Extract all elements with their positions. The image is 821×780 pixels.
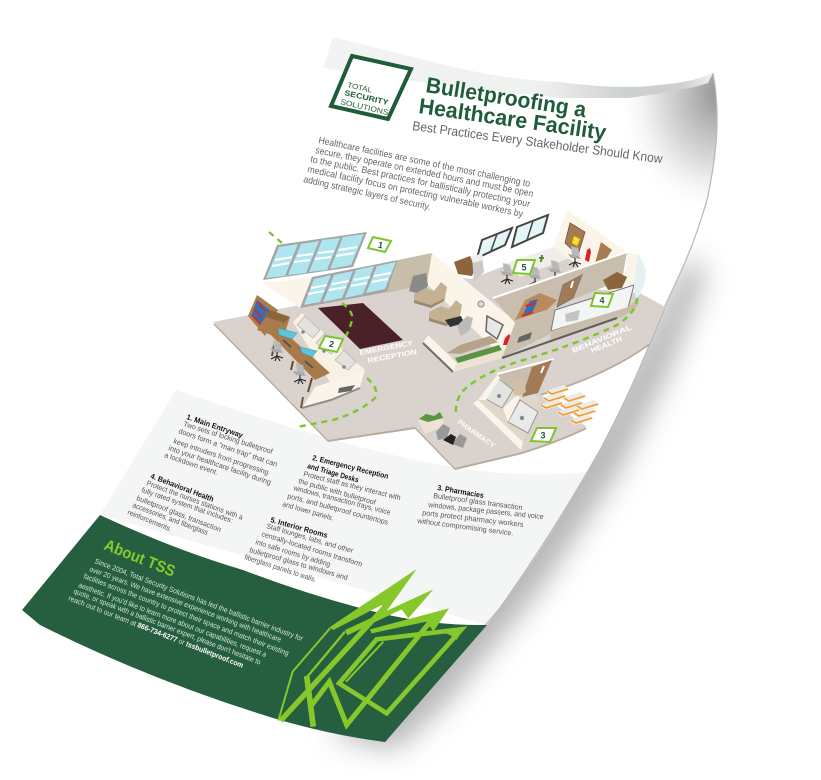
office chairs xyxy=(270,340,306,384)
cabinet xyxy=(603,272,627,290)
logo: SOLUTIONS xyxy=(340,97,389,117)
about text: aesthetic. If you'd like to learn more about our capabilities, request a xyxy=(77,580,269,659)
right edge of the sheet xyxy=(385,73,717,742)
wall clock xyxy=(478,301,484,307)
floor labels: EMERGENCY xyxy=(359,340,414,357)
title: Bulletproofing a xyxy=(424,72,589,122)
badge 1 xyxy=(368,237,391,252)
wall sign xyxy=(517,332,532,343)
floor labels: RECEPTION xyxy=(367,349,418,365)
booth glass panels xyxy=(486,378,538,433)
filing cabinet xyxy=(257,310,290,339)
text block: pharmacies: Bulletproof glass transaction xyxy=(433,491,523,512)
text block: main entryway: Two sets of locking bulletproof xyxy=(182,419,275,456)
text block: pharmacies xyxy=(416,483,544,538)
extinguisher xyxy=(585,248,591,262)
text block: main entryway: 1. Main Entryway xyxy=(185,412,245,440)
text block: main entryway: doors form a “man trap” that can xyxy=(177,426,279,469)
intro paragraph: to the public. Best practices for ballistically protecting your xyxy=(309,154,531,210)
base stripe xyxy=(502,318,617,358)
curl shading xyxy=(638,73,716,191)
lounge chairs xyxy=(414,282,462,326)
intro paragraph: secure, they operate on extended hours and must be open xyxy=(314,145,534,200)
entry windows back row xyxy=(263,232,367,280)
glass corner xyxy=(634,255,646,300)
badge 5 xyxy=(513,260,535,274)
booth cream walls xyxy=(473,375,523,450)
plant xyxy=(539,255,544,262)
text block: interior rooms: 5. Interior Rooms xyxy=(269,515,329,540)
paper sheet xyxy=(100,37,718,742)
badge 1: 1 xyxy=(377,240,384,250)
panel: about TSS xyxy=(22,515,487,742)
room floor xyxy=(468,247,582,298)
text block: behavioral health: 4. Behavioral Health xyxy=(149,471,215,504)
logo: SECURITY xyxy=(344,88,389,107)
subtitle: Best Practices Every Stakeholder Should Know xyxy=(412,118,664,166)
floor xyxy=(213,275,665,470)
badge 2 xyxy=(319,336,343,352)
door xyxy=(557,275,582,307)
pharmacy waiting chairs and planter xyxy=(418,412,467,448)
curved lower wall xyxy=(550,290,640,340)
about text: reach out to our team at 866-734-6277 or tssbulletproof.com xyxy=(67,593,245,670)
badge 5: 5 xyxy=(521,262,527,272)
text block: behavioral health: accessories, and fiberglass xyxy=(131,500,210,537)
text block: behavioral health xyxy=(126,471,245,537)
about text: Since 2004, Total Security Solutions has led the ballistic barrier industry for xyxy=(93,556,305,643)
nurse station desk xyxy=(565,310,580,322)
logo: TOTAL xyxy=(347,80,373,95)
dashed route paths xyxy=(269,232,637,427)
reception floor mat xyxy=(318,303,403,349)
keyboards xyxy=(283,340,313,368)
title: Healthcare Facility xyxy=(417,93,609,145)
badge 4 xyxy=(591,293,613,307)
floor labels xyxy=(359,324,634,450)
reception low wall and planter xyxy=(423,335,510,372)
text block: behavioral health: reinforcements. xyxy=(126,508,173,533)
text block: emergency reception: the public with bulletproof xyxy=(297,476,378,507)
floor labels: HEALTH xyxy=(590,336,623,355)
long desk xyxy=(268,328,330,392)
badge 3 xyxy=(531,428,556,442)
text block: main entryway: keep intruders from progressing xyxy=(172,436,270,477)
side chair xyxy=(457,316,473,336)
table chairs xyxy=(500,246,581,287)
intro paragraph xyxy=(302,135,534,220)
floor labels: PHARMACY xyxy=(456,419,496,450)
text block: emergency reception xyxy=(281,453,402,527)
front wall xyxy=(301,370,365,408)
nurse station window xyxy=(551,285,634,331)
low table xyxy=(445,316,464,327)
text block: emergency reception: 2. Emergency Reception xyxy=(312,453,390,481)
fire extinguisher xyxy=(503,334,511,345)
text block: interior rooms: centrally-located rooms transform xyxy=(260,529,363,569)
booth floor xyxy=(478,375,540,442)
intro paragraph: Healthcare facilities are some of the most challenging to xyxy=(317,135,531,190)
pharmacy xyxy=(473,359,600,450)
floor labels: BEHAVIORAL xyxy=(571,324,634,355)
text block: emergency reception: and Triage Desks xyxy=(306,461,360,485)
pharmacy back wall and door xyxy=(497,359,554,397)
text block: interior rooms: fiberglass panels to walls. xyxy=(243,552,317,584)
text block: main entryway: into your healthcare facility during xyxy=(167,443,272,487)
green logo mark xyxy=(278,569,464,727)
text block: behavioral health: Protect the nurses stations with a xyxy=(145,478,245,522)
text block: pharmacies: windows, package passers, and voice xyxy=(427,500,544,521)
about text: over 20 years. We have extensive experience working with healthcare xyxy=(88,564,283,644)
text block: main entryway: a lockdown event. xyxy=(163,450,219,477)
kiosk xyxy=(409,273,428,295)
text block: pharmacies: 3. Pharmacies xyxy=(437,483,485,500)
intro paragraph: adding strategic layers of security. xyxy=(302,174,432,213)
cork board xyxy=(565,223,585,255)
bookcase xyxy=(248,295,278,336)
upper interior room xyxy=(454,210,627,298)
back cream wall xyxy=(553,210,627,270)
equipment xyxy=(510,380,526,398)
intro paragraph: medical facility focus on protecting vulnerable workers by xyxy=(306,164,524,220)
text block: emergency reception: and lower panels. xyxy=(281,499,335,523)
door xyxy=(595,242,612,263)
text block: interior rooms: Staff lounges, labs, and other xyxy=(265,521,355,555)
monitors xyxy=(278,328,317,357)
floor plan illustration xyxy=(213,210,665,470)
reception back wall xyxy=(387,253,432,293)
windows xyxy=(477,215,548,258)
text block: interior rooms: into safe rooms by adding xyxy=(254,537,332,569)
text block: pharmacies: ports protect pharmacy workers xyxy=(422,508,524,529)
triage desk area xyxy=(248,295,365,408)
cabinet and copier xyxy=(454,254,484,281)
text block: behavioral health: bulletproof glass, transaction xyxy=(135,493,223,534)
text block: interior rooms: bulletproof glass to windows and xyxy=(248,545,349,582)
light section of the page xyxy=(100,390,587,625)
partition panels xyxy=(293,313,365,382)
title xyxy=(417,72,609,145)
top header band xyxy=(323,37,713,98)
badge 4: 4 xyxy=(599,296,605,306)
storage bookcase xyxy=(515,293,557,320)
page drop shadow xyxy=(330,255,706,750)
about text: quote, or speak with a ballistic barrier expert, please don't hesitate to xyxy=(72,586,262,667)
badge 3: 3 xyxy=(540,430,546,440)
entry windows front row xyxy=(300,260,398,308)
cream entry wall xyxy=(262,277,312,308)
about heading: About TSS xyxy=(102,537,178,581)
text block: behavioral health: fully rated system that includes: xyxy=(140,485,234,525)
text block: interior rooms xyxy=(243,515,363,584)
text block: emergency reception: windows, transaction trays, voice xyxy=(292,483,392,517)
text block: emergency reception: ports, and bulletproof countertops xyxy=(286,491,390,527)
orange shelving xyxy=(539,385,600,425)
about text: facilities across the country to protect their space and match their existing xyxy=(82,571,290,658)
waiting area wall xyxy=(409,253,516,358)
text block: emergency reception: Protect staff as they interact with xyxy=(303,469,402,502)
text block: pharmacies: without compromising service. xyxy=(416,516,514,538)
logo xyxy=(331,56,411,119)
framed poster xyxy=(486,316,503,339)
behavioral health wall xyxy=(493,252,646,358)
text block: main entryway xyxy=(163,412,279,487)
badge 2: 2 xyxy=(328,339,335,349)
